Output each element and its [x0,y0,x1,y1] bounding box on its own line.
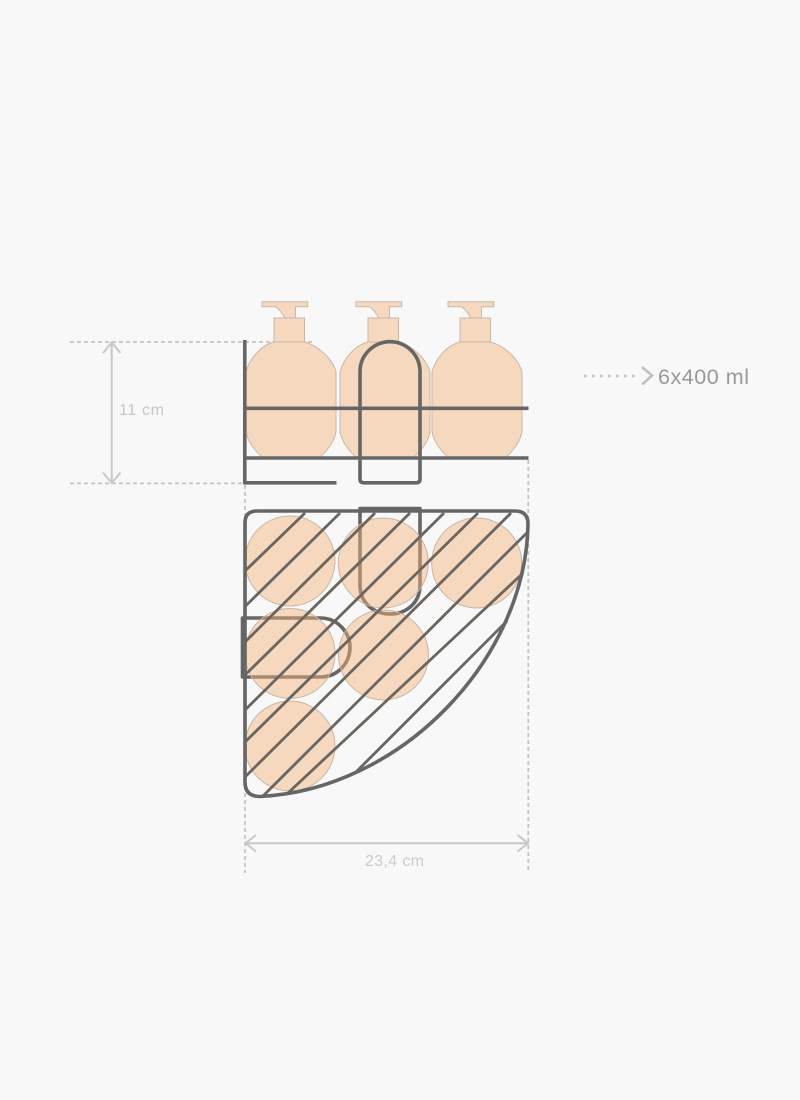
capacity arrow [584,367,652,384]
width dimension arrow [246,835,528,852]
width label: 23,4 cm [365,853,424,870]
capacity label: 6x400 ml [658,365,749,389]
front view: wire shelf [245,340,529,484]
front view: bottle 3 [432,302,522,457]
height dimension arrow [103,342,120,483]
top view: shelf outline [245,511,528,796]
top view: diagonal slats [245,513,528,796]
top view: frame hooks [242,508,420,677]
front view: bottle 1 [246,302,336,457]
height guide lines [70,342,315,483]
width guide lines [245,460,528,873]
front view: bottle 2 [340,302,430,457]
top view: six bottles [245,516,522,791]
height label: 11 cm [119,402,164,419]
